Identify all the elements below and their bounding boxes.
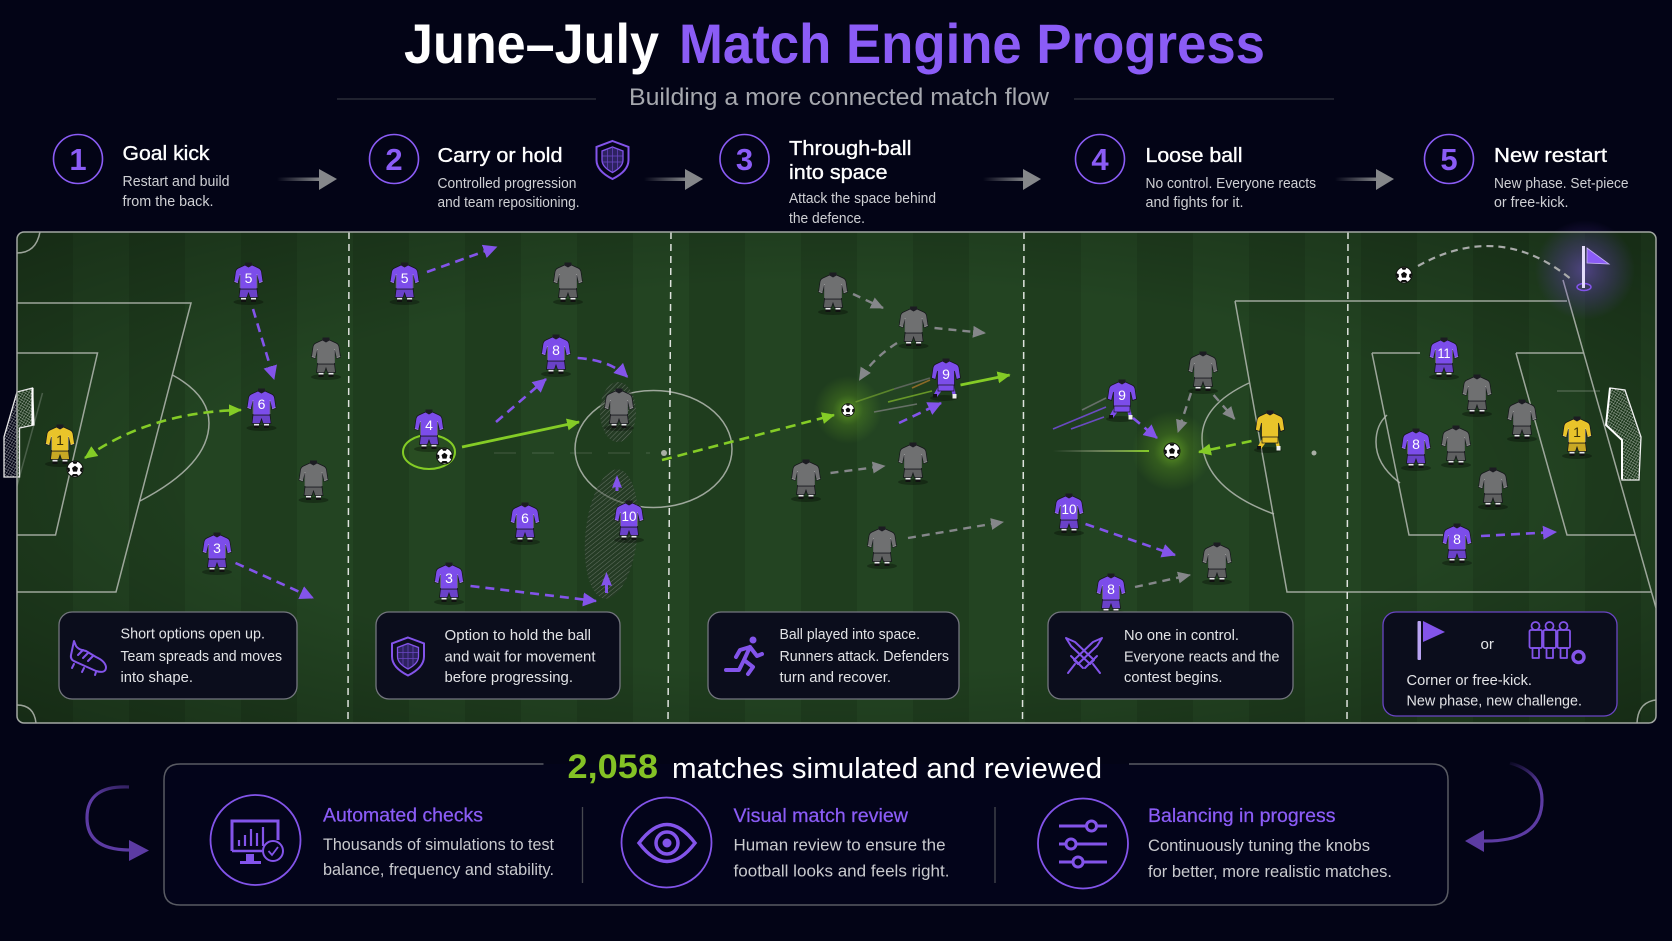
player: purple 11: 11 bbox=[1438, 345, 1451, 361]
player: goalkeeper yellow 1: 1 bbox=[1573, 424, 1581, 440]
step 1: goal kick: 1 bbox=[69, 142, 87, 177]
step 3: through-ball into space: 3 bbox=[736, 142, 753, 177]
arrow: run of 8 bbox=[1481, 532, 1556, 536]
callout: no one in control: No one in control. bbox=[1124, 628, 1239, 644]
player: purple 9 running bbox=[1106, 380, 1136, 422]
item: automated checks: balance, frequency and stability. bbox=[323, 861, 554, 879]
player: purple 8 bbox=[541, 334, 571, 377]
scene 3: through-ball players and arrows bbox=[662, 272, 1010, 569]
item: automated checks: Automated checks bbox=[323, 806, 483, 826]
arrow: defender turn bbox=[860, 343, 897, 380]
icon: boot bbox=[71, 641, 106, 675]
ball bbox=[1396, 267, 1412, 283]
divider bbox=[994, 807, 996, 883]
item: visual match review bbox=[622, 798, 950, 888]
step 2: carry or hold: and team repositioning. bbox=[438, 195, 580, 211]
panel dividers bbox=[348, 232, 1348, 723]
scene 1: goal kick players and arrows bbox=[45, 262, 341, 598]
player: goalkeeper yellow 1 bbox=[45, 424, 75, 467]
item: balancing in progress: for better, more realistic matches. bbox=[1148, 863, 1392, 881]
icon: monitor with check bbox=[232, 821, 283, 864]
corner flag glow bbox=[1535, 220, 1635, 320]
player: purple 5: 5 bbox=[245, 270, 253, 286]
goal: left bbox=[4, 388, 34, 477]
callout: corner or free-kick: or bbox=[1480, 637, 1494, 653]
step 5: new restart: New restart bbox=[1494, 145, 1607, 167]
ball glow bbox=[814, 376, 882, 444]
arrow: run of 5 bbox=[253, 309, 274, 379]
arrow: step 2 to 3 bbox=[644, 169, 703, 190]
player: grey bbox=[1188, 352, 1218, 394]
panel: football pitch bbox=[4, 220, 1656, 723]
player: purple 8: 8 bbox=[1453, 531, 1461, 547]
callout: option to hold: Option to hold the ball bbox=[444, 628, 591, 644]
arrow: corner delivery bbox=[1418, 246, 1572, 280]
icon: eye bbox=[639, 824, 695, 862]
step 1: goal kick: Goal kick bbox=[122, 143, 211, 165]
step 2: carry or hold: Controlled progression bbox=[438, 176, 576, 192]
ring around ball carrier bbox=[403, 435, 455, 469]
step 3: through-ball into space: the defence. bbox=[789, 211, 865, 227]
arrow: run of 8 bbox=[1135, 575, 1190, 587]
player: purple 8: 8 bbox=[1107, 581, 1115, 597]
player: grey defender bbox=[298, 460, 328, 503]
item: balancing in progress: Balancing in progress bbox=[1148, 806, 1336, 827]
player: purple 3 bbox=[202, 532, 232, 575]
step 2: carry or hold: Carry or hold bbox=[438, 145, 562, 167]
step 5: new restart: or free-kick. bbox=[1494, 195, 1568, 211]
item: automated checks: Thousands of simulations to test bbox=[323, 836, 554, 854]
callout: no one in control: contest begins. bbox=[1124, 670, 1222, 686]
player: purple 4: 4 bbox=[425, 417, 433, 433]
step 1: goal kick bbox=[54, 134, 230, 210]
player: grey bbox=[898, 442, 928, 485]
item: visual match review: Human review to ensure the bbox=[734, 836, 946, 854]
pitch markings: left end bbox=[9, 232, 209, 723]
player: purple 9 running bbox=[930, 358, 960, 401]
arrow: keeper to ball bbox=[1199, 441, 1252, 452]
subtitle: Building a more connected match flow bbox=[629, 84, 1050, 111]
pitch markings: centre circle bbox=[494, 390, 732, 508]
player: grey bbox=[553, 262, 583, 305]
arrow: defender recovery bbox=[934, 328, 985, 333]
step 3: through-ball into space: Through-ball bbox=[789, 138, 912, 160]
panel: testing summary bbox=[164, 748, 1448, 905]
player: purple 8: 8 bbox=[1412, 436, 1420, 452]
arrow: left loop bbox=[87, 787, 149, 861]
player: grey defender bbox=[311, 338, 341, 380]
title: June–July bbox=[404, 12, 659, 75]
icon: corner flag bbox=[1577, 246, 1609, 290]
small run markers bbox=[601, 475, 622, 593]
arrow: run to 8 bbox=[496, 379, 546, 422]
step 4: loose ball bbox=[1076, 134, 1316, 211]
player: purple 10 bbox=[1054, 494, 1084, 536]
player: grey bbox=[1441, 426, 1471, 468]
step 2: carry or hold bbox=[370, 134, 580, 211]
callout: short options bbox=[59, 612, 297, 699]
icon: flag bbox=[1418, 621, 1445, 660]
player: purple 11 bbox=[1429, 338, 1459, 380]
callout: short options: Team spreads and moves bbox=[120, 649, 282, 665]
speed streaks bbox=[1053, 398, 1106, 429]
step 1: goal kick: Restart and build bbox=[122, 174, 230, 190]
callout: no one in control: Everyone reacts and the bbox=[1124, 650, 1280, 666]
ball bbox=[1164, 443, 1180, 459]
icon: shield bbox=[596, 141, 628, 179]
item: visual match review: football looks and feels right. bbox=[734, 862, 950, 880]
player: grey bbox=[1462, 374, 1492, 417]
player: grey bbox=[604, 388, 634, 431]
step 1: goal kick: from the back. bbox=[122, 194, 214, 210]
callout: ball into space: turn and recover. bbox=[780, 670, 891, 686]
callout: corner or free-kick: Corner or free-kick. bbox=[1406, 673, 1532, 689]
arrow: defender recovery bbox=[830, 466, 885, 473]
arrow: short pass bbox=[85, 410, 241, 458]
item: balancing in progress bbox=[1038, 798, 1392, 888]
arrow: run of 3 bbox=[236, 563, 313, 598]
heading: matches simulated: 2,058 bbox=[568, 748, 658, 786]
callout: corner or free-kick: New phase, new challenge. bbox=[1406, 694, 1582, 710]
step 3: through-ball into space: into space bbox=[789, 162, 888, 184]
arrow: defender to ball bbox=[1178, 393, 1191, 432]
arrow: run of 3 bbox=[470, 586, 596, 601]
callout: no one in control bbox=[1048, 612, 1293, 699]
arrow: through ball bbox=[662, 415, 834, 460]
hatched cover zones bbox=[579, 382, 644, 601]
callout: ball into space bbox=[708, 612, 959, 699]
arrow: defender recovery bbox=[853, 294, 883, 308]
step 5: new restart bbox=[1424, 134, 1628, 211]
title bbox=[404, 12, 1265, 75]
player: purple 5 bbox=[390, 262, 420, 305]
player: grey bbox=[791, 460, 821, 502]
icon: wall of players with gear bbox=[1530, 622, 1584, 662]
player: purple 5: 5 bbox=[401, 270, 409, 286]
player: purple 8 bbox=[1096, 574, 1126, 616]
scene 2: carry or hold players and arrows bbox=[390, 247, 644, 605]
callout: ball into space: Ball played into space. bbox=[780, 627, 920, 643]
heading: matches simulated: matches simulated and reviewed bbox=[672, 753, 1102, 785]
scene 5: new restart players and arrows bbox=[1396, 220, 1635, 566]
ball bbox=[67, 461, 83, 477]
player: purple 3 bbox=[434, 562, 464, 605]
player: purple 6: 6 bbox=[521, 510, 529, 526]
callout: short options: into shape. bbox=[120, 670, 193, 686]
icon: runner bbox=[726, 636, 762, 674]
icon: sliders bbox=[1059, 821, 1107, 867]
player: purple 6: 6 bbox=[258, 396, 266, 412]
player: goalkeeper yellow bbox=[1254, 410, 1284, 453]
player: purple 10 bbox=[614, 500, 644, 543]
item: visual match review: Visual match review bbox=[734, 806, 908, 827]
player: purple 8 bbox=[1401, 428, 1431, 471]
step 3: through-ball into space: Attack the space behind bbox=[789, 191, 936, 207]
arrow: run of 5 bbox=[427, 247, 496, 272]
step 4: loose ball: 4 bbox=[1091, 142, 1109, 177]
step 5: new restart: New phase. Set-piece bbox=[1494, 176, 1628, 192]
player: grey bbox=[1478, 468, 1508, 510]
title: Match Engine Progress bbox=[679, 12, 1265, 75]
step 2: carry or hold: 2 bbox=[385, 142, 403, 177]
player: purple 10: 10 bbox=[622, 508, 637, 524]
callout: corner or free-kick bbox=[1383, 612, 1617, 716]
speed streaks bbox=[856, 378, 932, 412]
player: purple 5 bbox=[234, 262, 264, 305]
goal: right bbox=[1606, 388, 1641, 480]
arrow: striker direction bbox=[960, 375, 1010, 385]
player: purple 3: 3 bbox=[445, 570, 453, 586]
player: purple 8 bbox=[1442, 524, 1472, 566]
ball bbox=[436, 448, 452, 464]
scene 4: loose ball players and arrows bbox=[1053, 352, 1284, 616]
item: balancing in progress: Continuously tuning the knobs bbox=[1148, 837, 1370, 855]
arrow: 9 to ball bbox=[1133, 418, 1157, 438]
callout: short options: Short options open up. bbox=[120, 626, 265, 642]
step 4: loose ball: and fights for it. bbox=[1146, 195, 1244, 211]
arrow: run of 8 bbox=[578, 358, 628, 377]
step 5: new restart: 5 bbox=[1440, 142, 1458, 177]
player: grey bbox=[899, 306, 929, 349]
arrow: step 3 to 4 bbox=[983, 169, 1041, 190]
step 4: loose ball: No control. Everyone reacts bbox=[1146, 176, 1316, 192]
step 4: loose ball: Loose ball bbox=[1146, 145, 1242, 167]
player: goalkeeper yellow 1: 1 bbox=[56, 432, 64, 448]
player: grey bbox=[1507, 400, 1537, 442]
player: purple 6 bbox=[510, 502, 540, 545]
arrow: run of 10 bbox=[1086, 524, 1175, 555]
player: purple 9 running: 9 bbox=[942, 366, 950, 382]
ball bbox=[842, 404, 854, 416]
arrow: right loop bbox=[1465, 763, 1542, 852]
callout: option to hold: before progressing. bbox=[444, 670, 573, 686]
player: purple 9 running: 9 bbox=[1118, 387, 1126, 403]
player: purple 4 bbox=[414, 410, 444, 452]
player: purple 3: 3 bbox=[213, 540, 221, 556]
ball trail bbox=[1053, 450, 1149, 452]
player: grey bbox=[818, 272, 848, 315]
player: goalkeeper yellow 1 bbox=[1562, 416, 1592, 459]
arrow: carry bbox=[462, 422, 579, 447]
callout: ball into space: Runners attack. Defenders bbox=[780, 649, 949, 665]
arrow: step 1 to 2 bbox=[277, 169, 337, 190]
callout: option to hold: and wait for movement bbox=[444, 650, 596, 666]
callout: option to hold bbox=[376, 612, 620, 699]
icon: shield bbox=[392, 638, 424, 676]
heading: matches simulated bbox=[568, 748, 1102, 786]
pitch markings: right end bbox=[1202, 280, 1656, 723]
divider bbox=[582, 807, 584, 883]
player: purple 10: 10 bbox=[1062, 501, 1077, 517]
player: grey bbox=[867, 526, 897, 569]
icon: crossed swords bbox=[1066, 638, 1102, 673]
arrow: step 4 to 5 bbox=[1335, 169, 1394, 190]
arrow: runner bbox=[899, 403, 941, 423]
player: purple 8: 8 bbox=[552, 342, 560, 358]
item: automated checks bbox=[210, 795, 554, 885]
player: grey bbox=[1202, 542, 1232, 585]
arrow: defender recovery bbox=[908, 522, 1003, 538]
player: purple 6 bbox=[246, 388, 276, 431]
step 3: through-ball into space bbox=[720, 134, 936, 227]
arrow: defender bbox=[1214, 395, 1235, 419]
ball glow bbox=[1132, 411, 1212, 491]
